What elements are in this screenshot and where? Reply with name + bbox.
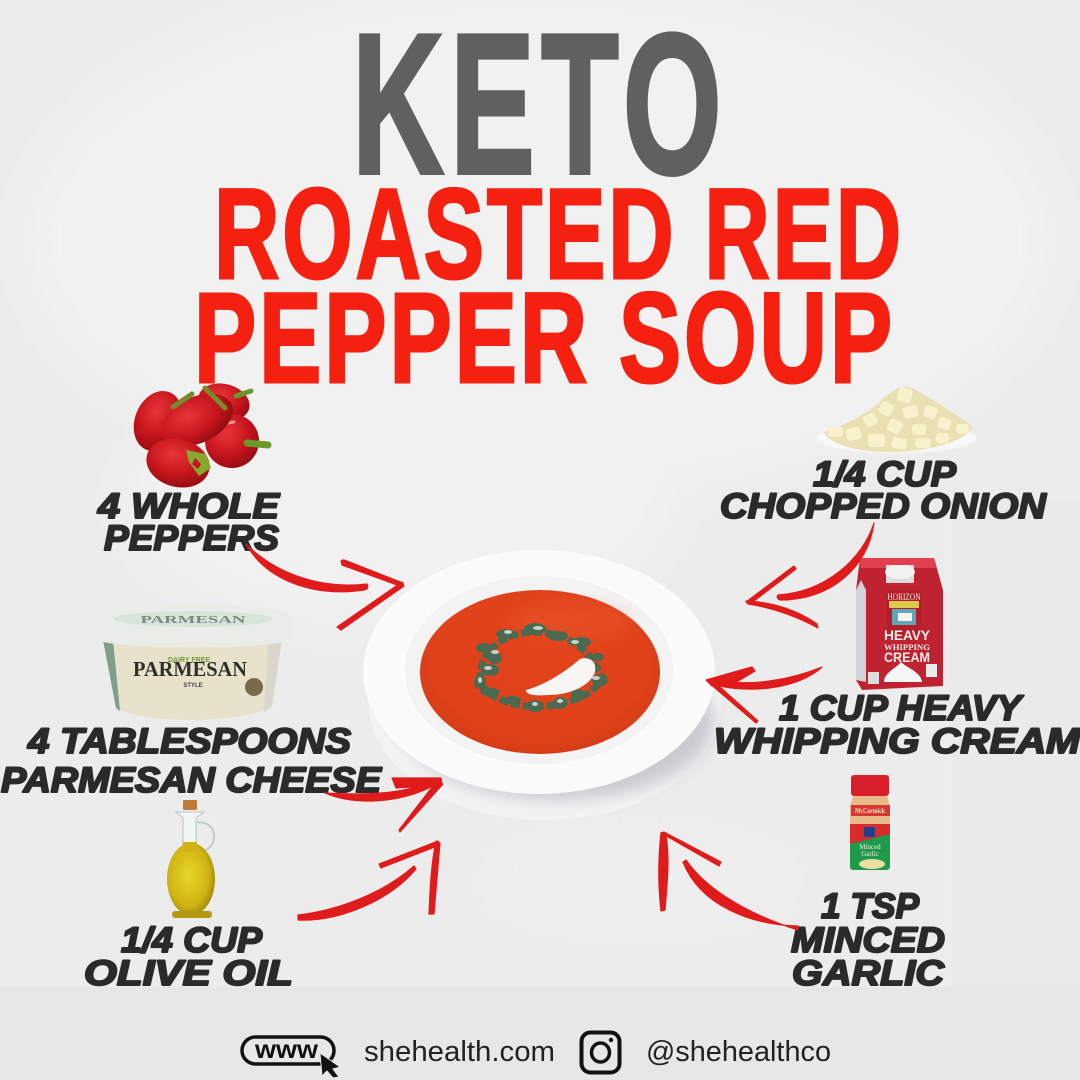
label: 1 tsp minced garlic: MINCED bbox=[791, 921, 945, 960]
icon: www cursor bbox=[242, 1036, 340, 1078]
ingredient: peppers bbox=[125, 378, 268, 494]
soup bowl on plate bbox=[363, 550, 721, 820]
arrow: peppers to soup bbox=[246, 544, 404, 630]
product name: HEAVY bbox=[884, 627, 931, 643]
ingredient: parmesan tub: STYLE bbox=[183, 683, 203, 689]
label: 1 cup heavy whipping cream: 1 CUP HEAVY bbox=[779, 689, 1024, 728]
footer: instagram bbox=[582, 1032, 831, 1072]
label: 1 tsp minced garlic bbox=[791, 887, 945, 993]
ingredient: parmesan tub: PARMESAN bbox=[133, 657, 247, 681]
ingredient: minced garlic jar: Minced bbox=[859, 843, 881, 851]
ingredient: chopped onion bbox=[817, 386, 977, 453]
label: 1 cup heavy whipping cream: WHIPPING CREAM bbox=[714, 722, 1080, 761]
label: 1/4 cup chopped onion: 1/4 CUP bbox=[813, 455, 957, 494]
pepper left bbox=[125, 384, 191, 458]
ingredient: olive oil bottle bbox=[167, 800, 215, 918]
label: 1 tsp minced garlic: 1 TSP bbox=[821, 887, 920, 926]
label: 1 cup heavy whipping cream bbox=[714, 689, 1080, 761]
icon: instagram bbox=[582, 1032, 620, 1072]
label: 4 tablespoons parmesan cheese: PARMESAN CHEESE bbox=[1, 761, 383, 800]
label: 4 whole peppers: 4 WHOLE bbox=[97, 487, 281, 526]
label: 4 whole peppers bbox=[97, 487, 281, 558]
label: 1 tsp minced garlic: GARLIC bbox=[792, 954, 945, 993]
tub body bbox=[103, 640, 282, 720]
arrow: onion to soup bbox=[746, 523, 874, 628]
icon: www cursor: www bbox=[254, 1036, 319, 1064]
ingredient: minced garlic jar bbox=[850, 775, 890, 870]
plate bbox=[363, 550, 715, 794]
ingredient: heavy cream carton bbox=[856, 558, 943, 690]
ingredient: heavy cream carton: CREAM bbox=[884, 649, 930, 665]
cap bbox=[886, 565, 914, 583]
label: 1/4 cup chopped onion bbox=[720, 455, 1047, 526]
ingredient: heavy cream carton: WHIPPING bbox=[884, 642, 930, 652]
label: 4 tablespoons parmesan cheese bbox=[1, 722, 383, 800]
ingredient: parmesan tub bbox=[94, 605, 292, 720]
tub text: DAIRY FREE bbox=[168, 657, 210, 664]
label: 1/4 cup olive oil: OLIVE OIL bbox=[84, 954, 293, 993]
cream dollop bbox=[526, 658, 595, 695]
footer: instagram: @shehealthco bbox=[646, 1036, 831, 1068]
arrow: cream to soup bbox=[706, 667, 822, 723]
ingredient: minced garlic jar: McCormick bbox=[855, 807, 885, 815]
soup bbox=[420, 590, 660, 754]
arrow: olive oil to soup bbox=[298, 841, 440, 920]
footer: website: shehealth.com bbox=[364, 1036, 555, 1068]
ingredient: heavy cream carton: HORIZON bbox=[888, 592, 921, 602]
label: 1/4 cup chopped onion: CHOPPED ONION bbox=[720, 487, 1047, 526]
label: 4 tablespoons parmesan cheese: 4 TABLESPOONS bbox=[27, 722, 351, 761]
label: 4 whole peppers: PEPPERS bbox=[104, 519, 279, 558]
pepper front bbox=[141, 432, 215, 494]
brand bbox=[887, 590, 921, 636]
pepper back bbox=[194, 378, 254, 426]
lid bbox=[94, 605, 292, 648]
arrow: garlic to soup bbox=[659, 832, 798, 930]
ingredient: minced garlic jar: Garlic bbox=[861, 850, 879, 858]
label: 1/4 cup olive oil bbox=[84, 921, 293, 993]
garnish ring bbox=[474, 623, 608, 712]
label: 1/4 cup olive oil: 1/4 CUP bbox=[121, 921, 263, 960]
ingredient: parmesan tub: PARMESAN bbox=[140, 615, 247, 626]
under plate shadow bbox=[369, 590, 721, 820]
footer: website bbox=[242, 1036, 555, 1078]
pepper center bbox=[153, 383, 241, 457]
pepper right bbox=[205, 414, 259, 468]
arrow: parmesan to soup bbox=[325, 778, 443, 832]
